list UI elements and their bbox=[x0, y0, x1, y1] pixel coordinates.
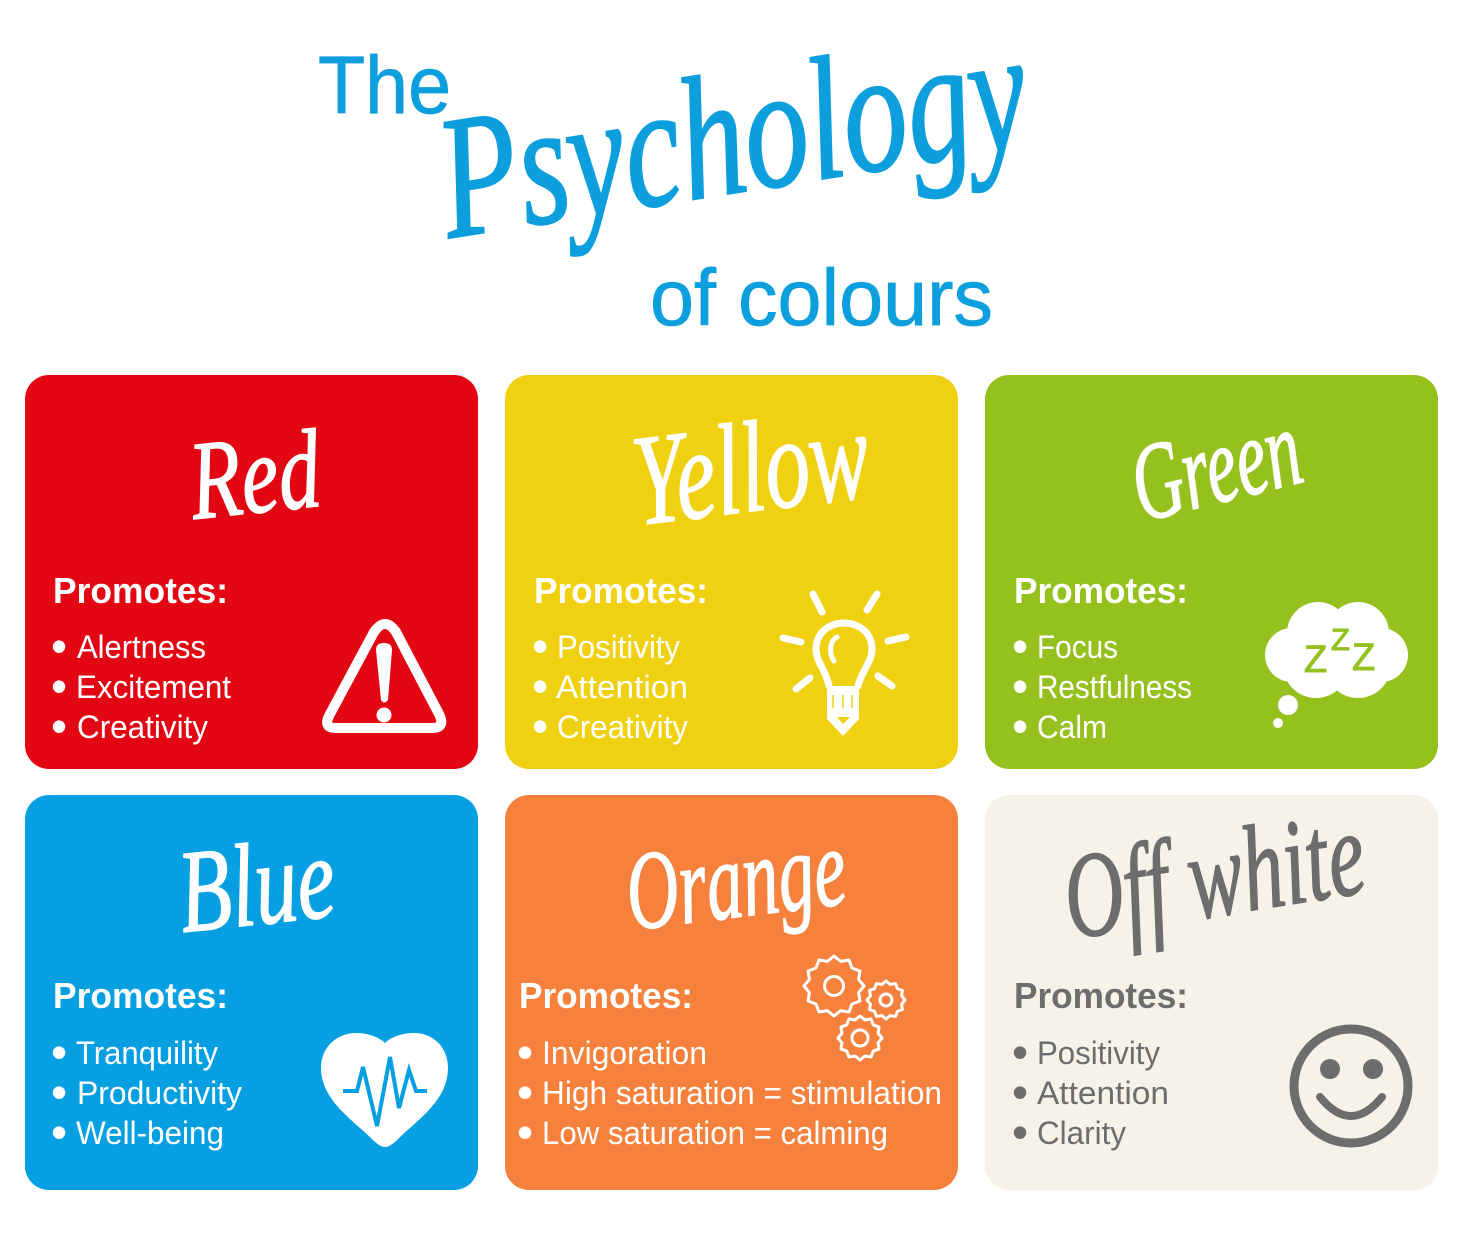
text: orange promotes: • bbox=[517, 1026, 533, 1078]
text: orange promotes: • bbox=[517, 1106, 533, 1158]
panel: green bbox=[985, 375, 1438, 769]
text: off white promotes: • bbox=[1012, 1106, 1028, 1158]
text: green promotes bbox=[1012, 570, 1192, 752]
text: yellow promotes: Promotes: bbox=[534, 570, 708, 611]
heading: green: Green bbox=[1118, 386, 1313, 545]
text: off white promotes: • bbox=[1012, 1026, 1028, 1078]
text: yellow promotes bbox=[532, 570, 708, 752]
panel: orange bbox=[505, 795, 958, 1190]
icon: warning triangle bbox=[327, 624, 441, 728]
text: yellow promotes: Attention bbox=[556, 669, 688, 705]
text: red promotes: Creativity bbox=[77, 709, 208, 745]
text: blue promotes: Well-being bbox=[76, 1115, 224, 1151]
text: off white promotes: • bbox=[1012, 1066, 1028, 1118]
text: red promotes bbox=[51, 570, 231, 752]
panel: yellow bbox=[505, 375, 958, 769]
text: green promotes: • bbox=[1012, 660, 1028, 712]
text: yellow promotes: • bbox=[532, 620, 548, 672]
text: orange promotes: Low saturation = calming bbox=[542, 1115, 888, 1151]
icon: heart with pulse bbox=[321, 1033, 448, 1147]
text: yellow promotes: Creativity bbox=[557, 709, 688, 745]
text: off white promotes: Positivity bbox=[1037, 1035, 1160, 1071]
text: red promotes: • bbox=[51, 620, 67, 672]
text: blue promotes: Productivity bbox=[77, 1075, 242, 1111]
text: green promotes: Restfulness bbox=[1037, 669, 1192, 705]
icon: gears bbox=[804, 956, 905, 1060]
text: orange promotes: High saturation = stimulation bbox=[542, 1075, 942, 1111]
heading: orange: Orange bbox=[619, 805, 852, 955]
text: orange promotes: • bbox=[517, 1066, 533, 1118]
text: orange promotes: Promotes: bbox=[519, 975, 693, 1016]
icon: sleep cloud: Z bbox=[1304, 639, 1327, 681]
text: blue promotes: • bbox=[51, 1106, 67, 1158]
text: off white promotes: Attention bbox=[1037, 1075, 1169, 1111]
text: red promotes: Promotes: bbox=[53, 570, 228, 611]
text: off white promotes: Promotes: bbox=[1014, 975, 1188, 1016]
panel: blue bbox=[25, 795, 478, 1190]
text: yellow promotes: • bbox=[532, 660, 548, 712]
text: red promotes: Alertness bbox=[77, 629, 206, 665]
icon: sleep cloud: Z bbox=[1331, 622, 1350, 657]
text: off white promotes: Clarity bbox=[1037, 1115, 1126, 1151]
text: orange promotes bbox=[517, 975, 942, 1158]
text: green promotes: Calm bbox=[1037, 709, 1107, 745]
text: blue promotes: Promotes: bbox=[53, 975, 228, 1016]
text: yellow promotes: Positivity bbox=[557, 629, 680, 665]
text: red promotes: Excitement bbox=[76, 669, 231, 705]
heading: blue: Blue bbox=[172, 811, 341, 958]
text: green promotes: Focus bbox=[1037, 629, 1118, 665]
text: green promotes: Promotes: bbox=[1014, 570, 1188, 611]
icon: sleep cloud: Z bbox=[1352, 637, 1375, 679]
icon: sleep cloud bbox=[1265, 602, 1408, 728]
text: yellow promotes: • bbox=[532, 700, 548, 752]
text: blue promotes bbox=[51, 975, 242, 1158]
panel: red bbox=[25, 375, 478, 769]
heading: yellow: Yellow bbox=[625, 382, 877, 554]
icon: light bulb bbox=[783, 594, 906, 736]
text: off white promotes bbox=[1012, 975, 1188, 1158]
title: of colours bbox=[650, 253, 993, 342]
heading: red: Red bbox=[183, 407, 327, 544]
text: green promotes: • bbox=[1012, 700, 1028, 752]
text: red promotes: • bbox=[51, 700, 67, 752]
text: green promotes: • bbox=[1012, 620, 1028, 672]
text: red promotes: • bbox=[51, 660, 67, 712]
title bbox=[318, 0, 1040, 342]
panel: off white bbox=[985, 785, 1438, 1190]
text: blue promotes: • bbox=[51, 1066, 67, 1118]
text: orange promotes: Invigoration bbox=[542, 1035, 707, 1071]
text: blue promotes: • bbox=[51, 1026, 67, 1078]
title: The bbox=[318, 40, 451, 131]
text: blue promotes: Tranquility bbox=[76, 1035, 218, 1071]
icon: smiley bbox=[1294, 1029, 1408, 1143]
